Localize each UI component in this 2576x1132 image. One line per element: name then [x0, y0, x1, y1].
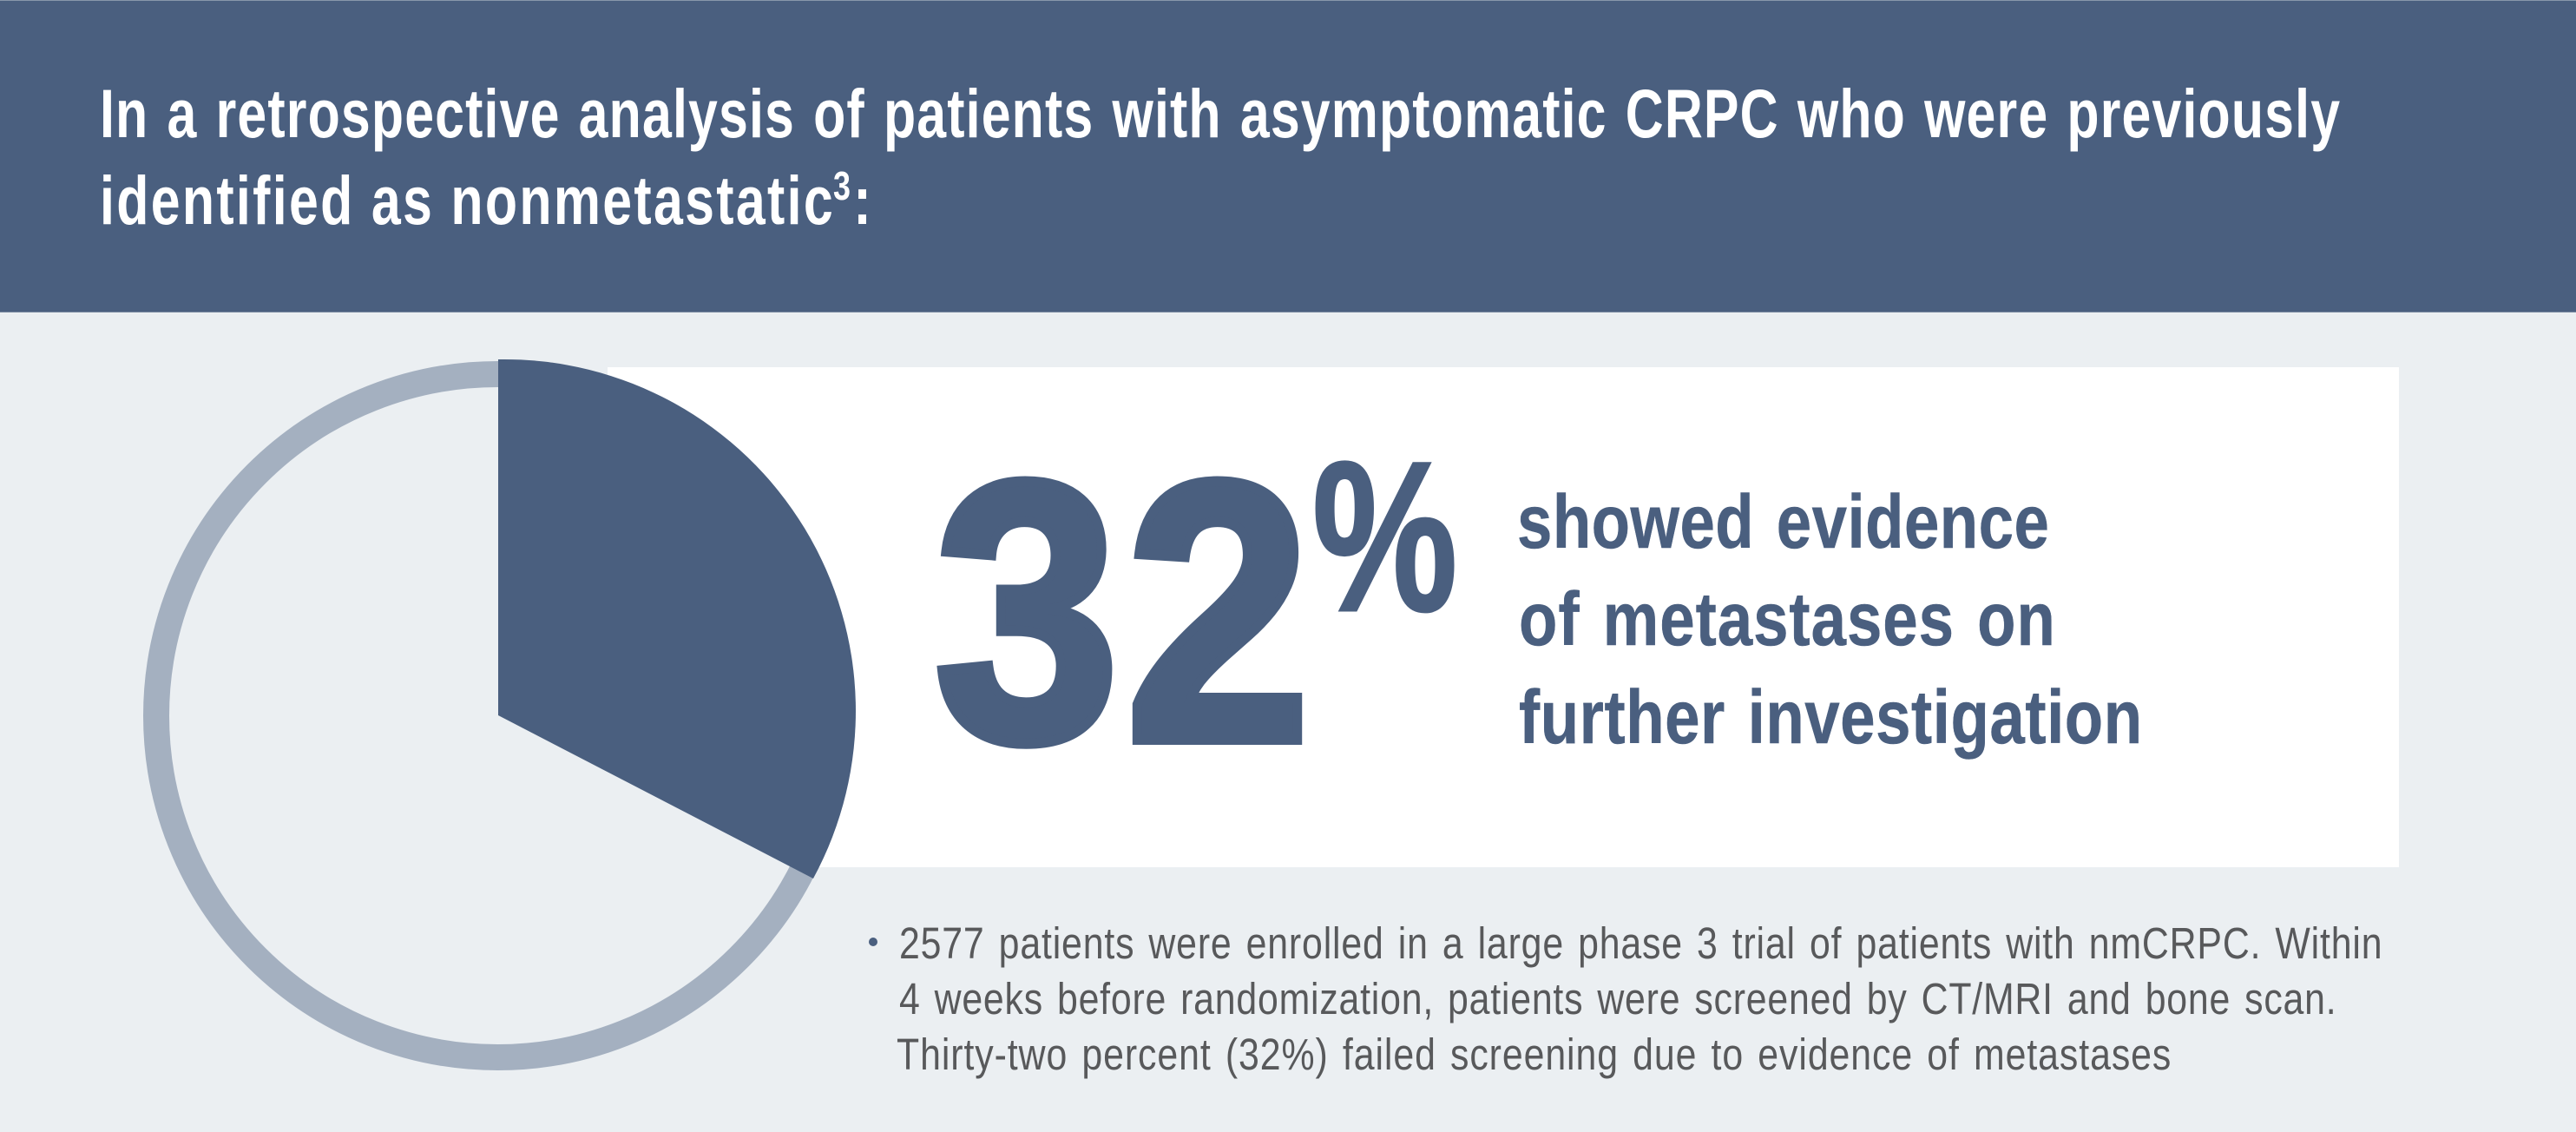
superscript reference: 3: [833, 164, 851, 208]
pie wedge: [498, 359, 856, 879]
statement line 2: of metastases on: [1519, 576, 2055, 661]
percent sign: %: [1312, 418, 1457, 656]
heading colon: :: [853, 162, 871, 240]
note line 2: 4 weeks before randomization, patients were screened by CT/MRI and bone scan.: [899, 973, 2336, 1023]
statement line 1: showed evidence: [1517, 479, 2049, 563]
panel: header banner: [0, 0, 2576, 313]
note line 1: 2577 patients were enrolled in a large phase 3 trial of patients with nmCRPC. Within: [899, 918, 2382, 968]
bullet marker: [869, 938, 877, 946]
statement text: [1517, 479, 2142, 759]
heading line 2: identified as nonmetastatic: [100, 161, 833, 239]
bullet note: [869, 918, 2382, 1079]
pie chart: 32 percent: [156, 359, 856, 1057]
statement line 3: further investigation: [1519, 675, 2142, 759]
heading line 1: In a retrospective analysis of patients with asymptomatic CRPC who were previously: [100, 75, 2340, 152]
pie ring: [156, 374, 839, 1057]
big statistic 32%: [935, 405, 1457, 818]
note line 3: Thirty-two percent (32%) failed screening due to evidence of metastases: [897, 1029, 2171, 1079]
digits 32: 32: [935, 405, 1311, 818]
panel: white callout: [608, 367, 2399, 867]
